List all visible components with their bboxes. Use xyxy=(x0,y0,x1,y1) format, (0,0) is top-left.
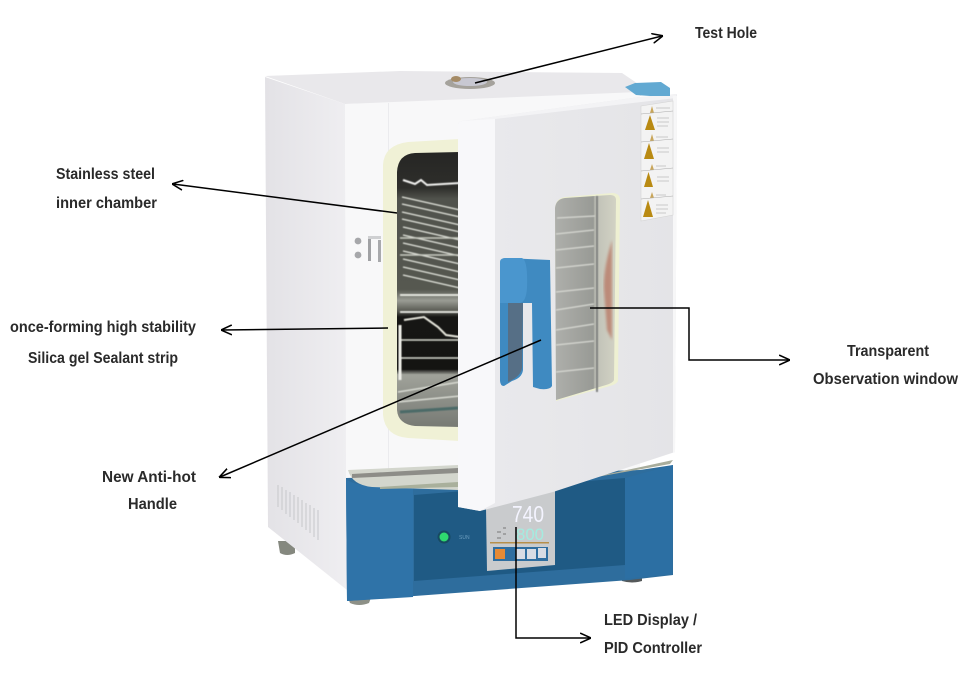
power indicator xyxy=(438,530,470,544)
silica gel gasket xyxy=(383,139,460,441)
label: LED display / PID controller: PID Controller xyxy=(604,640,702,657)
blue base xyxy=(346,460,673,601)
label: sealant strip xyxy=(10,319,196,367)
label: stainless steel inner chamber: Stainless steel xyxy=(56,166,155,183)
arrow: test hole xyxy=(475,36,662,83)
readout 740: 740 xyxy=(512,501,544,527)
test hole xyxy=(445,76,495,89)
label: test hole: Test Hole xyxy=(695,25,757,42)
label: stainless steel inner chamber: inner chamber xyxy=(56,195,157,212)
door latch xyxy=(625,82,670,96)
inner chamber xyxy=(397,152,460,427)
handle xyxy=(500,258,552,389)
arrow: handle xyxy=(220,340,541,477)
label: anti-hot handle: New Anti-hot xyxy=(102,469,197,486)
label: anti-hot handle: Handle xyxy=(128,496,177,513)
arrow: sealant strip xyxy=(222,328,388,330)
readout 800: 800 xyxy=(516,525,544,544)
door xyxy=(458,82,677,511)
oven side panel xyxy=(265,77,347,590)
controller panel xyxy=(486,490,555,571)
arrow: stainless steel chamber xyxy=(173,184,397,213)
oven feet xyxy=(278,541,642,605)
arrow: observation window xyxy=(590,308,789,360)
arrow: LED display xyxy=(516,527,590,638)
label: stainless steel inner chamber xyxy=(56,166,157,212)
observation window xyxy=(555,193,620,401)
label: sealant strip: once-forming high stability xyxy=(10,319,196,336)
power indicator: SUN xyxy=(459,535,470,541)
label: observation window: Transparent xyxy=(847,343,930,360)
label: observation window xyxy=(813,343,959,388)
label: LED display / PID controller xyxy=(604,612,702,657)
window reflection xyxy=(556,196,597,392)
oven illustration xyxy=(265,71,677,605)
oven top surface xyxy=(265,71,650,104)
label: LED display / PID controller: LED Display / xyxy=(604,612,698,629)
label: sealant strip: Silica gel Sealant strip xyxy=(28,350,178,367)
warning labels xyxy=(641,101,673,221)
oven front panel xyxy=(345,92,640,480)
chamber shelves xyxy=(398,180,460,412)
label: anti-hot handle xyxy=(102,469,197,513)
door hinge xyxy=(355,236,381,262)
